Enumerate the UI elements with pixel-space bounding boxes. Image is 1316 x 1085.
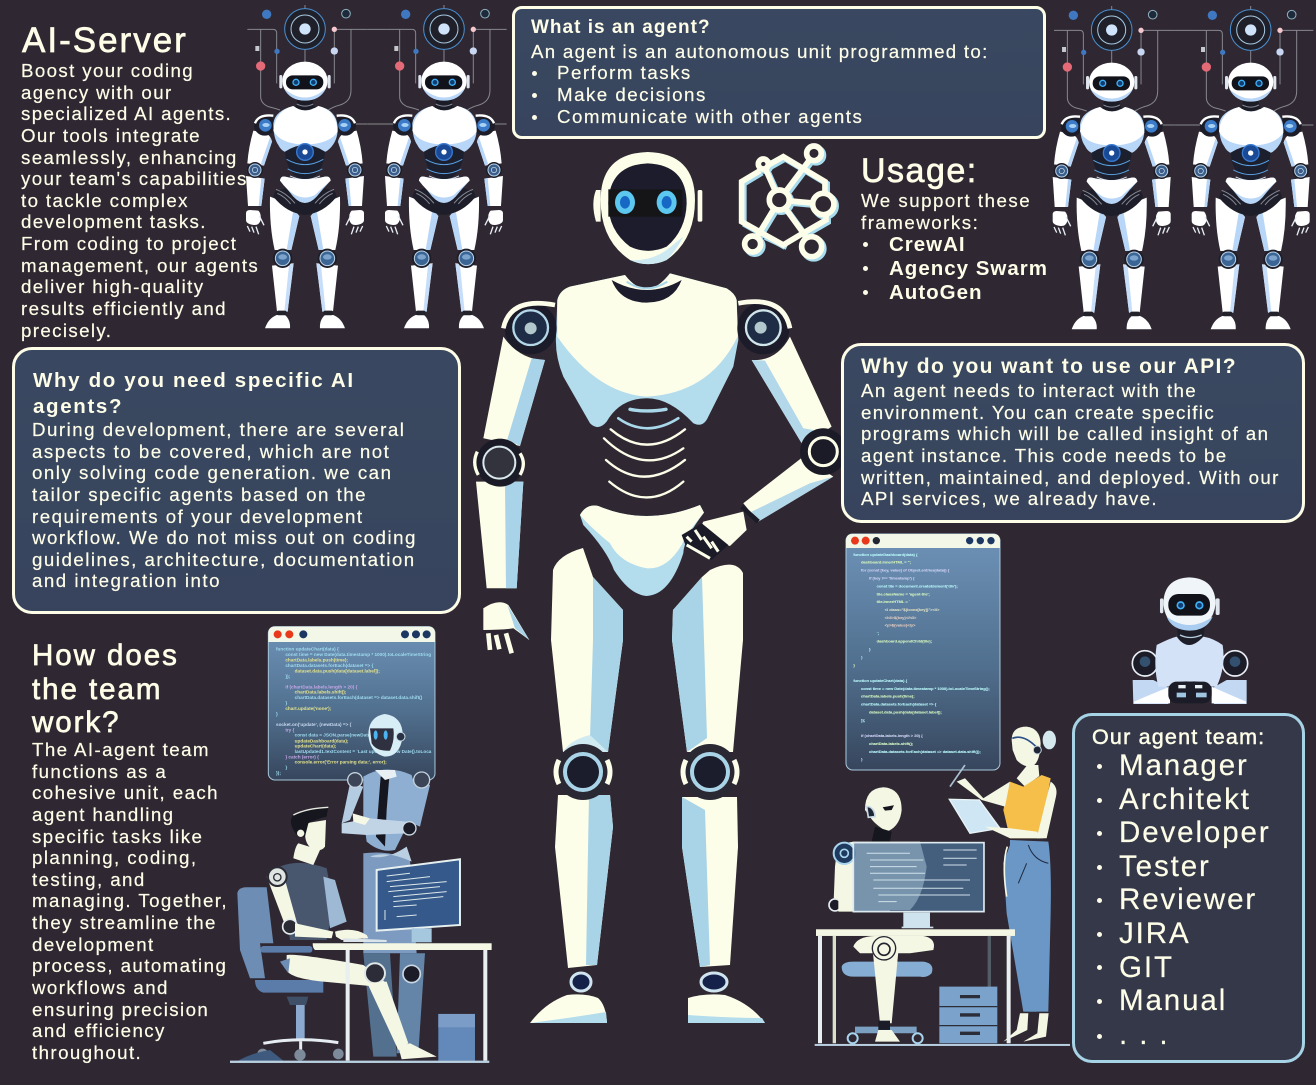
left code window: }); — [285, 674, 291, 679]
left code window: try { — [285, 727, 295, 732]
desk — [230, 943, 492, 1063]
right code window: dashboard.innerHTML = ''; — [861, 559, 911, 564]
heading: our agent team: Our agent team: — [1092, 725, 1265, 749]
right code window: if (chartData.labels.length > 20) { — [861, 733, 923, 738]
left code window: dataset.data.push(data[dataset.label]); — [295, 669, 380, 674]
intro text block: Boost your coding agency with our specialized AI agents. Our tools integrate seamlessly, enhancing your team's capabilities to tackle complex development tasks. From coding to project management, our agents deliver high-quality results efficiently and precisely. — [21, 60, 259, 340]
explanation text: During development, there are several aspects to be covered, which are not only solving code generation. we can tailor specific agents based on the requirements of your development workflow. We do not miss out on coding guidelines, architecture, documentation and integration into — [32, 419, 417, 591]
left code window: } catch (error) { — [285, 754, 319, 759]
central right arm and hand — [682, 302, 847, 560]
panel: why use our API — [841, 343, 1305, 523]
bullet list: agent abilities: Perform tasks Make decisions Communicate with other agents — [557, 62, 863, 127]
title: AI-Server: AI-Server — [22, 21, 188, 60]
heading: usage: Usage: — [861, 152, 978, 190]
right desk and drawers — [815, 929, 1070, 1046]
left code window: chartData.labels.shift(); — [295, 690, 347, 695]
left code window: } — [276, 712, 278, 717]
left code window: updateDashboard(data); — [295, 738, 349, 743]
heading: why use our API: Why do you want to use our API? — [861, 355, 1237, 378]
panel: what is an agent — [512, 6, 1046, 139]
right code window: } — [861, 654, 863, 659]
right code window: chartData.labels.push(time); — [861, 694, 915, 699]
left code window: function updateChart(data) { — [276, 647, 339, 652]
right code window: dataset.data.push(data[dataset.label]); — [869, 710, 942, 715]
heading: why specific AI agents: Why do you need specific AI agents? — [33, 369, 355, 418]
seated man — [237, 807, 437, 1061]
panel: why specific AI agents — [12, 347, 461, 614]
right code window: chartData.labels.shift(); — [869, 741, 913, 746]
right code window: <i class="${icons[key]}"></i> — [885, 607, 940, 612]
right code window: <h3>${key}</h3> — [885, 615, 917, 620]
usage intro text: We support these frameworks: — [861, 190, 1031, 233]
left code window: const data = JSON.parse(newData); — [295, 733, 374, 738]
left code window: if (chartData.labels.length > 20) { — [285, 684, 358, 689]
right code window: if (key !== 'timestamp') { — [869, 575, 915, 580]
definition text: An agent is an autonomous unit programmed to: — [531, 41, 989, 62]
right monitor — [853, 843, 984, 928]
central robot legs — [530, 548, 765, 1023]
left code window: chart.update('none'); — [285, 706, 332, 711]
right code window: } — [869, 646, 871, 651]
left code window: socket.on('update', (newData) => { — [276, 722, 352, 727]
right code window: tile.innerHTML = ` — [877, 599, 911, 604]
left code window: lastUpdated1.textContent = `Last update: ${new Date().toLoca — [295, 749, 432, 754]
left code window: } — [285, 700, 287, 705]
central left arm — [475, 302, 557, 653]
left code window: } — [285, 765, 287, 770]
panel: our agent team — [1072, 713, 1305, 1063]
left code window: console.error('Error parsing data:', error); — [295, 760, 387, 765]
right code window: const tile = document.createElement('div'); — [877, 583, 958, 588]
central head — [593, 152, 702, 264]
icon: network hub — [742, 146, 836, 259]
standing robot — [342, 714, 430, 1057]
central robot upper body — [475, 152, 847, 653]
left code window: chartData.datasets.forEach(dataset => dataset.data.shift() — [295, 695, 423, 700]
right code window: `; — [877, 631, 879, 636]
right code window: <p>${value}</p> — [885, 623, 916, 628]
heading: what is an agent: What is an agent? — [531, 17, 711, 38]
right code window: function updateDashboard(data) { — [853, 552, 918, 557]
left code window — [268, 627, 435, 780]
woman — [949, 727, 1057, 1042]
right code window: } — [861, 757, 863, 762]
right code window: dashboard.appendChild(tile); — [877, 639, 932, 644]
left code window: chartData.labels.push(time); — [285, 658, 348, 663]
right code window — [846, 534, 1000, 770]
right code window: function updateChart(data) { — [853, 678, 908, 683]
robot pair top right — [1053, 6, 1313, 329]
right code window: const time = new Date(data.timestamp * 1000).toLocaleTimeString(); — [861, 686, 990, 691]
central torso — [556, 273, 738, 427]
API explanation text: An agent needs to interact with the environment. You can create specific programs which will be called insight of an agent instance. This code needs to be written, maintained, and deployed. With our API services, we already have. — [861, 380, 1280, 509]
agent role list: Manager Architekt Developer Tester Reviewer JIRA GIT Manual . . . — [1119, 749, 1271, 1051]
small robot above team panel — [1132, 577, 1248, 704]
seated robot — [829, 787, 934, 1043]
team work text: The AI-agent team functions as a cohesive unit, each agent handling specific tasks like planning, coding, testing, and managing. Together, they streamline the development process, automating workflows and ensuring precision and efficiency throughout. — [32, 739, 228, 1063]
right code window: } — [853, 662, 855, 667]
right code window: for (const [key, value] of Object.entries(data)) { — [861, 567, 950, 572]
central pelvis — [580, 505, 704, 596]
left code window: updateChart(data); — [295, 744, 337, 749]
left code window: chartData.datasets.forEach(dataset => { — [285, 663, 374, 668]
right code window: chartData.datasets.forEach(dataset => dataset.data.shift()); — [869, 749, 981, 754]
left code window: }); — [276, 770, 281, 775]
framework list: CrewAI Agency Swarm AutoGen — [889, 233, 1048, 304]
heading: how does the team work: How does the team work? — [32, 639, 179, 739]
central ribs — [604, 409, 685, 497]
robot pair top left — [246, 5, 507, 328]
right code window: }); — [861, 717, 865, 722]
left scene: robot, man and desk — [230, 714, 492, 1063]
right scene: robot, woman and desk — [815, 727, 1070, 1046]
right code window: tile.className = 'agent-tile'; — [877, 591, 930, 596]
right code window: chartData.datasets.forEach(dataset => { — [861, 702, 937, 707]
monitor — [377, 859, 460, 942]
left code window: const time = new Date(data.timestamp * 1000).toLocaleTimeString — [285, 652, 431, 657]
